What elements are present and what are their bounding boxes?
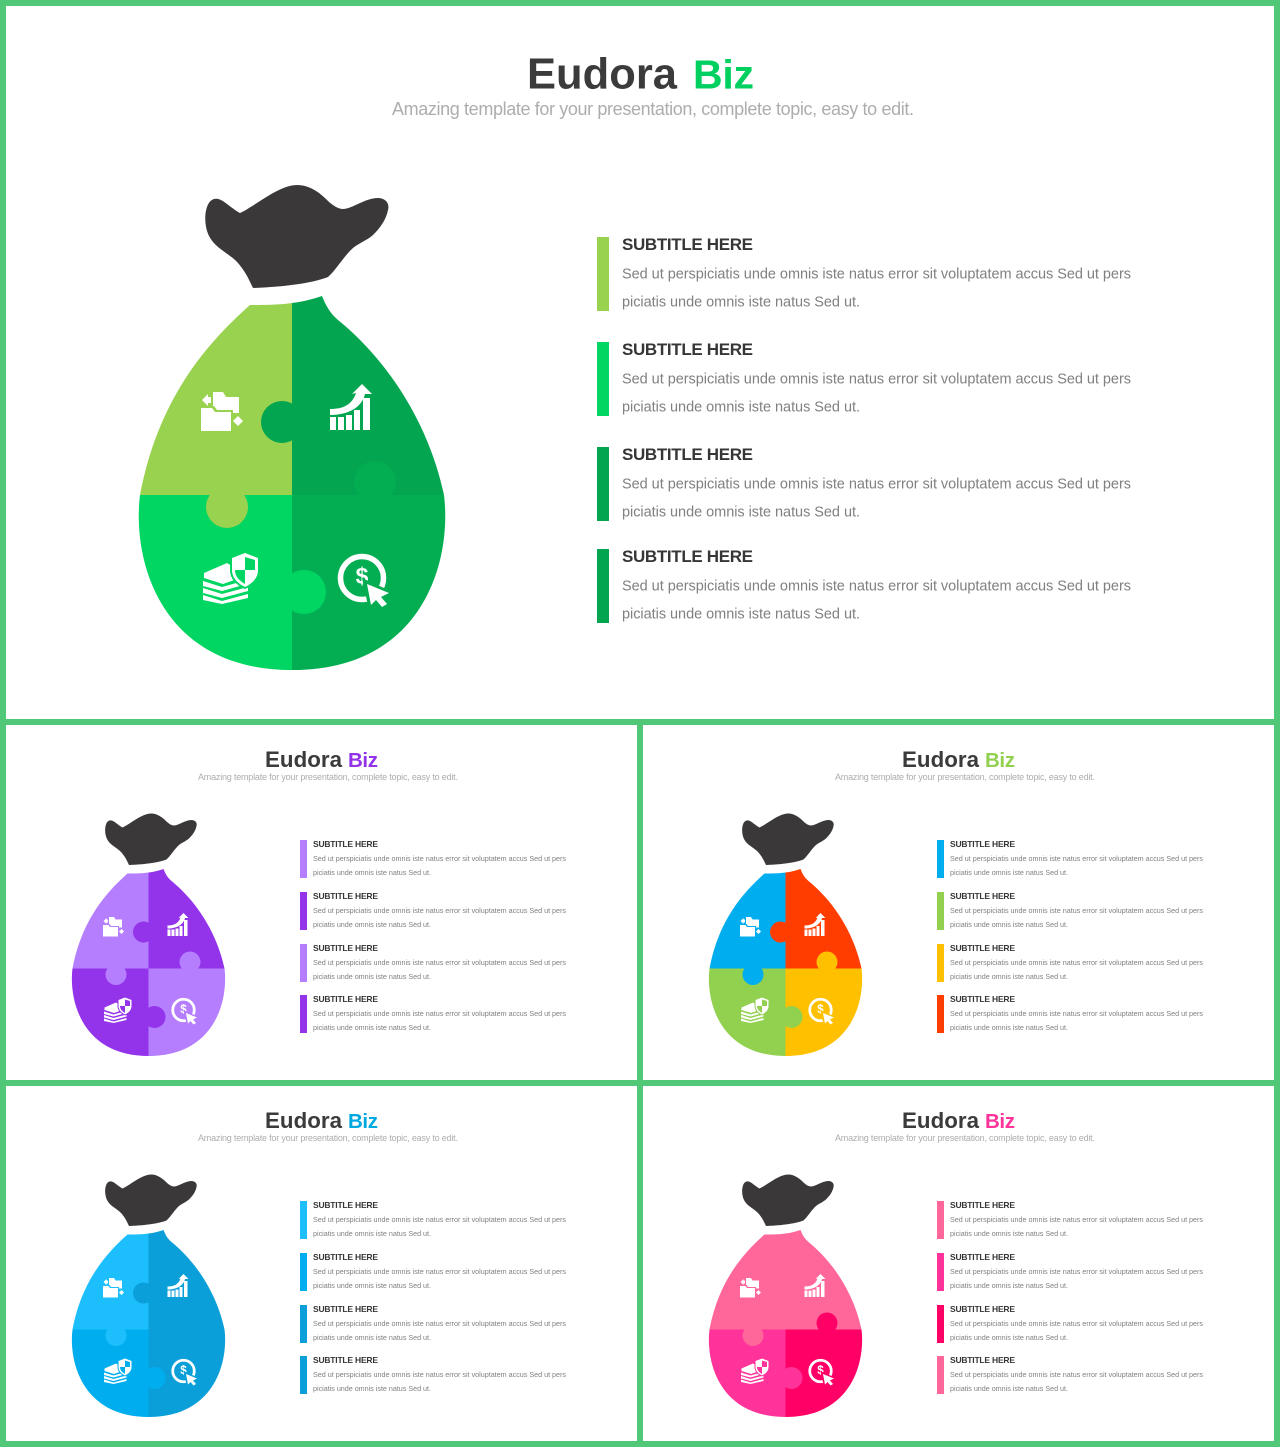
item 3 [300,943,566,982]
money bag puzzle: $ [817,1004,824,1016]
item 2 [937,891,1203,930]
item 3: piciatis unde omnis iste natus Sed ut. [313,972,431,981]
panel: multicolor slide [643,725,1274,1080]
item 4: piciatis unde omnis iste natus Sed ut. [622,606,860,622]
item 2: SUBTITLE HERE [622,340,753,359]
item 4: Sed ut perspiciatis unde omnis iste natus error sit voluptatem accus Sed ut pers [313,1009,566,1018]
item 2 [300,891,566,930]
item 4: SUBTITLE HERE [950,994,1015,1004]
item 4: Sed ut perspiciatis unde omnis iste natus error sit voluptatem accus Sed ut pers [950,1009,1203,1018]
item 3: piciatis unde omnis iste natus Sed ut. [950,972,1068,981]
item 3: SUBTITLE HERE [313,943,378,953]
item 3 [597,445,1131,521]
item 1: SUBTITLE HERE [313,1200,378,1210]
item 1: piciatis unde omnis iste natus Sed ut. [313,1229,431,1238]
money bag puzzle [72,1174,225,1417]
item 3 [937,1304,1203,1343]
panel: purple slide [6,725,637,1080]
item 2: Sed ut perspiciatis unde omnis iste natus error sit voluptatem accus Sed ut pers [313,906,566,915]
item 4: piciatis unde omnis iste natus Sed ut. [950,1023,1068,1032]
item 2: Sed ut perspiciatis unde omnis iste natus error sit voluptatem accus Sed ut pers [950,906,1203,915]
title: Eudora [265,747,343,772]
title: Eudora [265,1108,343,1133]
item 1: piciatis unde omnis iste natus Sed ut. [313,868,431,877]
money bag puzzle [709,1174,862,1417]
title: Biz [693,52,754,98]
item 1: Sed ut perspiciatis unde omnis iste natus error sit voluptatem accus Sed ut pers [950,1215,1203,1224]
item 3: SUBTITLE HERE [950,1304,1015,1314]
item 1: Sed ut perspiciatis unde omnis iste natus error sit voluptatem accus Sed ut pers [313,854,566,863]
item 3: piciatis unde omnis iste natus Sed ut. [313,1333,431,1342]
item 4: SUBTITLE HERE [950,1355,1015,1365]
item 2: Sed ut perspiciatis unde omnis iste natus error sit voluptatem accus Sed ut pers [950,1267,1203,1276]
icon: dollar click: $ [356,563,369,589]
panel: blue slide [6,1086,637,1441]
item 2: Sed ut perspiciatis unde omnis iste natus error sit voluptatem accus Sed ut pers [622,372,1131,388]
tagline: Amazing template for your presentation, complete topic, easy to edit. [198,1133,458,1143]
item 2 [597,340,1131,416]
item 4 [300,994,566,1033]
item 4 [937,994,1203,1033]
money bag puzzle: $ [817,1365,824,1377]
icon: dollar click [340,556,395,613]
item 2: SUBTITLE HERE [313,1252,378,1262]
item 1: SUBTITLE HERE [313,839,378,849]
item 4: Sed ut perspiciatis unde omnis iste natus error sit voluptatem accus Sed ut pers [313,1370,566,1379]
panel: pink slide [643,1086,1274,1441]
item 4: SUBTITLE HERE [622,547,753,566]
item 3: SUBTITLE HERE [950,943,1015,953]
item 1 [597,235,1131,311]
item 4 [937,1355,1203,1394]
item 4: piciatis unde omnis iste natus Sed ut. [313,1384,431,1393]
item 4 [300,1355,566,1394]
item 3: Sed ut perspiciatis unde omnis iste natus error sit voluptatem accus Sed ut pers [950,958,1203,967]
tagline: Amazing template for your presentation, complete topic, easy to edit. [198,772,458,782]
item 1: Sed ut perspiciatis unde omnis iste natus error sit voluptatem accus Sed ut pers [622,266,1131,282]
item 3: Sed ut perspiciatis unde omnis iste natus error sit voluptatem accus Sed ut pers [950,1319,1203,1328]
item 1: piciatis unde omnis iste natus Sed ut. [950,868,1068,877]
item 1: SUBTITLE HERE [622,235,753,254]
title: Eudora [902,747,980,772]
title: Biz [348,1110,378,1133]
item 1 [937,1200,1203,1239]
tagline: Amazing template for your presentation, complete topic, easy to edit. [835,772,1095,782]
money bag puzzle [709,814,862,1056]
title: Biz [985,749,1015,772]
item 3: piciatis unde omnis iste natus Sed ut. [622,504,860,520]
item 2: piciatis unde omnis iste natus Sed ut. [313,1281,431,1290]
title: Eudora [527,50,678,98]
item 3 [937,943,1203,982]
item 2: piciatis unde omnis iste natus Sed ut. [313,920,431,929]
item 3: Sed ut perspiciatis unde omnis iste natus error sit voluptatem accus Sed ut pers [313,1319,566,1328]
item 4: Sed ut perspiciatis unde omnis iste natus error sit voluptatem accus Sed ut pers [622,578,1131,594]
item 4: Sed ut perspiciatis unde omnis iste natus error sit voluptatem accus Sed ut pers [950,1370,1203,1379]
item 1 [937,839,1203,878]
item 1: Sed ut perspiciatis unde omnis iste natus error sit voluptatem accus Sed ut pers [950,854,1203,863]
money bag puzzle [139,185,445,670]
icon: growth chart [330,384,372,430]
tagline: Amazing template for your presentation, complete topic, easy to edit. [392,99,914,119]
item 2: piciatis unde omnis iste natus Sed ut. [950,1281,1068,1290]
item 2: SUBTITLE HERE [313,891,378,901]
item 2: SUBTITLE HERE [950,891,1015,901]
money bag puzzle [72,814,225,1056]
title: Biz [985,1110,1015,1133]
item 3: SUBTITLE HERE [622,445,753,464]
item 3 [300,1304,566,1343]
item 2: SUBTITLE HERE [950,1252,1015,1262]
item 3: Sed ut perspiciatis unde omnis iste natus error sit voluptatem accus Sed ut pers [622,476,1131,492]
money bag puzzle: $ [180,1004,187,1016]
item 4 [597,547,1131,623]
title: Biz [348,749,378,772]
item 3: SUBTITLE HERE [313,1304,378,1314]
item 1: piciatis unde omnis iste natus Sed ut. [950,1229,1068,1238]
item 2: piciatis unde omnis iste natus Sed ut. [622,400,860,416]
panel: main slide, green [6,6,1274,719]
item 4: piciatis unde omnis iste natus Sed ut. [313,1023,431,1032]
item 1 [300,839,566,878]
item 1: Sed ut perspiciatis unde omnis iste natus error sit voluptatem accus Sed ut pers [313,1215,566,1224]
item 4: SUBTITLE HERE [313,994,378,1004]
icon: folders [199,392,243,433]
tagline: Amazing template for your presentation, complete topic, easy to edit. [835,1133,1095,1143]
money bag puzzle: $ [180,1365,187,1377]
item 1: piciatis unde omnis iste natus Sed ut. [622,294,860,310]
item 4: piciatis unde omnis iste natus Sed ut. [950,1384,1068,1393]
item 3: Sed ut perspiciatis unde omnis iste natus error sit voluptatem accus Sed ut pers [313,958,566,967]
item 4: SUBTITLE HERE [313,1355,378,1365]
item 2 [300,1252,566,1291]
item 2 [937,1252,1203,1291]
item 2: piciatis unde omnis iste natus Sed ut. [950,920,1068,929]
title: Eudora [902,1108,980,1133]
item 2: Sed ut perspiciatis unde omnis iste natus error sit voluptatem accus Sed ut pers [313,1267,566,1276]
icon: money stack with shield [203,551,260,604]
item 3: piciatis unde omnis iste natus Sed ut. [950,1333,1068,1342]
item 1: SUBTITLE HERE [950,1200,1015,1210]
item 1 [300,1200,566,1239]
item 1: SUBTITLE HERE [950,839,1015,849]
